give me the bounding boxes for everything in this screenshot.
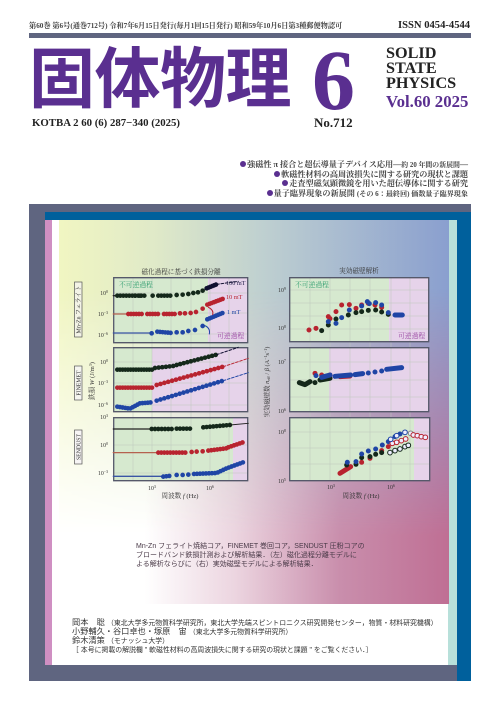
right axis ticks: 8 (284, 428, 286, 433)
ISSN: ISSN 0454-4544 (398, 20, 470, 31)
English title: PHYSICS (386, 74, 456, 92)
author credits: 岡本 聡 （東北大学多元物質科学研究所，東北大学先端スピントロニクス研究開発センター，物質・材料研究機構） (72, 618, 438, 626)
panel 3 series: SENDUST (113, 423, 248, 477)
author credits (72, 618, 438, 654)
left axis ticks: 10 (100, 415, 106, 421)
right y axis label: −1 (263, 355, 268, 360)
material tag: SENDUST: SENDUST (76, 433, 82, 460)
table of contents highlights: 量子臨界現象の新展開 (その 6：最終回) 価数量子臨界現象 (274, 189, 468, 198)
issue number: 6 (312, 32, 355, 128)
right y axis label: eff (266, 376, 271, 381)
material tag: FINEMET (74, 366, 82, 400)
left axis ticks: 10 (98, 403, 104, 409)
left x axis label: 周波数 f (Hz) (161, 491, 199, 500)
left axis ticks: −6 (104, 331, 108, 336)
material tag: FINEMET: FINEMET (76, 370, 82, 396)
right axis ticks: 10 (278, 326, 284, 332)
right axis ticks: 10 (278, 409, 284, 415)
material tag: Mn-Zn ferrite: Mn-Zn フェライト (76, 285, 82, 334)
table of contents highlights: 走査型磁気顕微鏡を用いた超伝導体に関する研究 (289, 179, 468, 188)
English title (386, 44, 456, 92)
right chart title: 実効磁壁解析 (339, 266, 379, 275)
left panel annotations: 可逆過程 (217, 331, 244, 340)
left y axis label: ) (89, 362, 96, 364)
right axis ticks: 10 (278, 288, 284, 294)
left axis ticks: −6 (104, 401, 108, 406)
left axis ticks: −3 (104, 379, 108, 384)
left axis ticks: 10 (98, 471, 104, 477)
panel 2 series: FINEMET (117, 347, 248, 409)
right panel annotations: 可逆過程 (398, 331, 425, 340)
table of contents highlights (240, 160, 468, 198)
right y axis label: −1 (263, 349, 268, 353)
title: 固体物理 (29, 44, 291, 117)
left panel annotations (119, 280, 246, 340)
left axis ticks: 3 (154, 484, 156, 489)
gradient figure panel (59, 220, 449, 604)
right axis ticks: 10 (278, 479, 284, 485)
left axis ticks: 3 (106, 413, 108, 418)
left axis ticks: 6 (212, 484, 214, 489)
material tag: SENDUST (74, 430, 82, 464)
right y axis label: ) (264, 347, 271, 349)
right axis ticks: 10 (327, 485, 333, 491)
left axis ticks: 0 (106, 358, 108, 363)
left axis ticks: −3 (104, 310, 108, 315)
right axis ticks: 9 (284, 286, 286, 291)
table of contents highlights: 強磁性 π 接合と超伝導量子デバイス応用—約 20 年間の新展開— (247, 160, 468, 169)
left y axis label: 鉄損 W (J/m (89, 366, 96, 400)
left axis ticks: 10 (100, 443, 106, 449)
figure caption (136, 542, 365, 568)
right data series (299, 302, 428, 473)
right axis ticks (278, 286, 395, 491)
left y axis label: 3 (88, 364, 93, 366)
volume and year: Vol.60 2025 (386, 92, 468, 111)
author credits: ［ 本号に掲載の解説欄 " 軟磁性材料の高周波損失に関する研究の現状と課題 " をご覧ください．］ (72, 646, 372, 654)
right panel annotations (295, 280, 425, 340)
journal code: KOTBA 2 60 (6) 287−340 (2025) (32, 117, 180, 129)
table of contents highlights: 軟磁性材料の高周波損失に関する研究の現状と課題 (281, 170, 468, 179)
right y axis label: s (264, 352, 271, 355)
header rule (29, 33, 471, 38)
right axis ticks: 6 (393, 483, 395, 488)
right axis ticks: 10 (387, 485, 393, 491)
right axis ticks: 6 (284, 407, 286, 412)
right axis ticks: 7 (284, 358, 286, 363)
left axis ticks: 10 (100, 360, 106, 366)
left axis ticks: 10 (148, 486, 154, 492)
right y axis label: β (A (264, 360, 271, 371)
issue total number: No.712 (314, 115, 353, 130)
publication info line: 第60巻 第6号(通巻712号) 令和7年6月15日発行(毎月1回15日発行) 昭和59年10月6日第3種郵便物認可 (29, 22, 342, 30)
left axis ticks: 10 (206, 486, 212, 492)
figure caption: Mn-Zn フェライト焼結コア，FINEMET 巻回コア，SENDUST 圧粉コアの (136, 543, 365, 550)
left axis ticks: 0 (106, 289, 108, 294)
author credits: 鈴木清策 （モナッシュ大学） (72, 636, 169, 644)
author credits: 小野輔久・谷口卓也・塚原 宙 （東北大学多元物質科学研究所） (72, 626, 292, 636)
left panel backgrounds (113, 277, 248, 481)
figure caption: ブロードバンド鉄損計測および解析結果．（左）磁化過程分離モデルに (136, 552, 357, 559)
panel 1 series: Mn-Zn ferrite (113, 281, 238, 334)
panel 3 scatter (340, 430, 428, 473)
right y axis label: 実効磁壁数 n (264, 381, 271, 417)
right axis ticks: 8 (284, 324, 286, 329)
right panel annotations: 不可逆過程 (295, 280, 329, 289)
left axis ticks: −3 (104, 469, 108, 474)
left axis ticks: 10 (100, 291, 106, 297)
cover frame (29, 204, 471, 681)
material tag: Mn-Zn ferrite (74, 282, 82, 337)
English title: SOLID (386, 44, 436, 62)
panel 1 scatter (309, 302, 402, 331)
left panel annotations: 100 mT (226, 280, 246, 287)
right axis ticks: 10 (278, 430, 284, 436)
figure caption: よる解析ならびに（右）実効磁壁モデルによる解析結果． (136, 561, 318, 568)
left panel annotations: 1 mT (227, 309, 240, 316)
right axis ticks: 10 (278, 360, 284, 366)
left panel annotations: 10 mT (226, 294, 243, 301)
chart: effective domain wall analysis (262, 266, 430, 500)
right axis ticks: 5 (284, 477, 286, 482)
chart: magnetization process loss separation (74, 267, 248, 500)
left axis ticks: 0 (106, 441, 108, 446)
right y axis label: / (264, 371, 271, 376)
right panel backgrounds (289, 277, 430, 481)
right axis ticks: 3 (333, 483, 335, 488)
right x axis label: 周波数 f (Hz) (342, 491, 380, 500)
left axis ticks: 10 (98, 381, 104, 387)
left chart title: 磁化過程に基づく鉄損分離 (141, 267, 221, 276)
English title: STATE (386, 59, 437, 77)
left axis ticks: 10 (98, 312, 104, 318)
left panel annotations: 不可逆過程 (119, 280, 153, 289)
left axis ticks: 10 (98, 333, 104, 339)
left axis ticks (98, 289, 214, 492)
left data series (113, 281, 248, 477)
panel 2 scatter (299, 368, 402, 385)
